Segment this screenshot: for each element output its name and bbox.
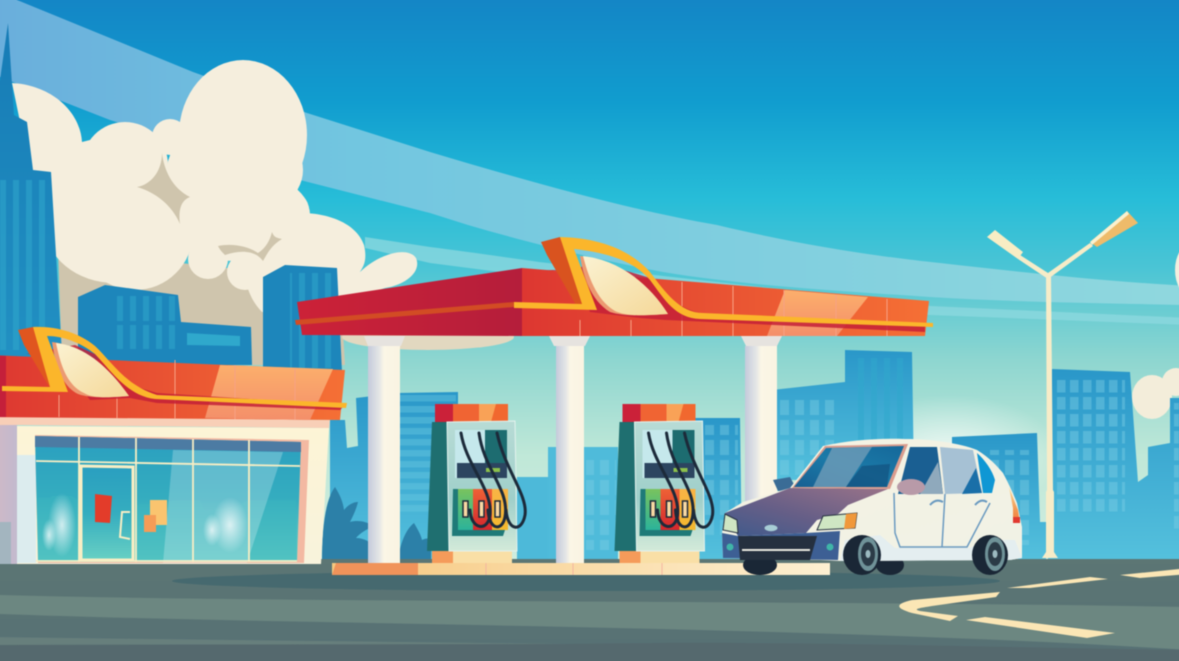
car front wheel	[843, 535, 881, 575]
car door handles	[930, 501, 987, 505]
car hood	[725, 488, 888, 536]
store glass sheen	[163, 450, 283, 563]
car door lines	[894, 493, 990, 547]
canopy seams	[580, 282, 887, 336]
car fog lights	[726, 544, 834, 550]
roof seams	[59, 360, 295, 420]
car taillight	[1009, 487, 1020, 523]
store dark transom	[35, 436, 301, 452]
building: left spire tower	[0, 23, 63, 370]
car windshield	[794, 446, 904, 487]
car front tire	[743, 555, 777, 575]
pump hoses	[461, 433, 525, 527]
road bottom dark	[0, 643, 1179, 661]
car chrome strip	[742, 549, 810, 551]
fuel pump 2	[614, 404, 713, 563]
cloud: far right small cloud	[1132, 368, 1179, 419]
car mirror	[897, 479, 925, 495]
car right headlight	[817, 513, 857, 530]
road markings	[899, 568, 1179, 638]
sign leaf	[580, 256, 668, 315]
fuel pump 1	[427, 404, 525, 563]
road thin band	[0, 637, 564, 645]
store cream frame	[17, 426, 329, 564]
store door	[81, 466, 133, 560]
store glass glows	[42, 493, 248, 557]
pump front	[447, 421, 517, 551]
car far-side mirror	[773, 477, 797, 491]
glow behind car	[840, 395, 1060, 515]
poster orange	[144, 515, 156, 532]
street lamp	[987, 211, 1138, 558]
store window frame shadow	[35, 435, 309, 563]
convenience store	[0, 416, 330, 564]
canopy columns	[364, 336, 782, 563]
light band: wide sky streak	[0, 0, 1179, 305]
car left headlight	[723, 514, 738, 533]
building: behind right pump	[680, 418, 742, 560]
sign orange side	[541, 237, 587, 305]
lamp right head	[1090, 211, 1138, 247]
pump screen	[455, 430, 507, 478]
store glazing	[35, 436, 301, 562]
poster yellow	[150, 500, 167, 525]
lamp arms	[1018, 243, 1093, 279]
roof slab	[0, 355, 345, 420]
road light band	[0, 595, 1179, 650]
cloud: low pale cloud under canopy	[342, 324, 514, 350]
canopy left crimson face	[297, 268, 522, 336]
building: right windowed tower	[1048, 369, 1179, 560]
car grille	[738, 536, 817, 560]
sign orange side	[18, 327, 63, 388]
building: tall mid office	[263, 265, 342, 372]
car logo	[764, 525, 778, 531]
column right	[741, 336, 782, 506]
sign yellow arch	[2, 327, 347, 408]
car shaded lower body	[840, 535, 1022, 561]
column center	[549, 336, 590, 563]
door handle	[120, 512, 130, 539]
poster red	[95, 494, 112, 523]
light band: thin sky streak	[365, 237, 1179, 325]
bushes	[322, 487, 431, 560]
car body	[722, 439, 1022, 561]
pump fuel panel	[452, 489, 508, 536]
cloud: shadow base	[58, 250, 345, 365]
store roof	[0, 327, 347, 420]
car far rear tire	[876, 555, 904, 575]
road	[0, 559, 1179, 661]
sign leaf	[52, 342, 129, 397]
roof highlight	[205, 365, 333, 420]
pump side	[427, 422, 449, 551]
cloud: inner shadow gaps	[137, 153, 282, 261]
forecourt platform	[332, 563, 830, 575]
building: behind car right	[952, 433, 1046, 560]
store reflected skyline	[38, 496, 297, 562]
building: mid-left office	[78, 285, 252, 365]
store left wall	[0, 417, 17, 564]
store mullions	[36, 437, 300, 562]
trash can	[0, 522, 11, 564]
building: behind car left	[772, 350, 914, 480]
canopy orange stripe	[295, 302, 514, 325]
building: center-left background	[330, 392, 458, 560]
car	[722, 439, 1022, 575]
forecourt shadow	[172, 571, 1000, 591]
car front side window	[898, 447, 943, 494]
car windshield frame	[792, 444, 908, 489]
pump cap	[435, 404, 508, 422]
store lower left panel	[17, 455, 36, 563]
car quarter window	[977, 453, 995, 493]
building: between pumps	[517, 447, 618, 562]
sign shadow	[545, 260, 925, 332]
column left	[364, 336, 405, 563]
sign shadow	[26, 345, 345, 410]
cloud: large cream cloud	[12, 60, 417, 312]
lamp left head	[987, 230, 1023, 259]
car rear side window	[940, 447, 982, 494]
canopy highlight	[767, 290, 868, 336]
platform orange end	[332, 563, 418, 575]
car rear wheel	[972, 535, 1008, 575]
cloud: far right edge cloud	[1175, 244, 1179, 296]
store top fascia	[0, 416, 330, 428]
roof crimson end	[0, 355, 6, 417]
canopy right orange face	[522, 268, 929, 336]
canopy	[295, 237, 933, 336]
car bumper	[722, 531, 840, 560]
pump base	[432, 551, 512, 563]
sign yellow arch	[514, 237, 933, 327]
lamp pole	[1042, 275, 1058, 558]
